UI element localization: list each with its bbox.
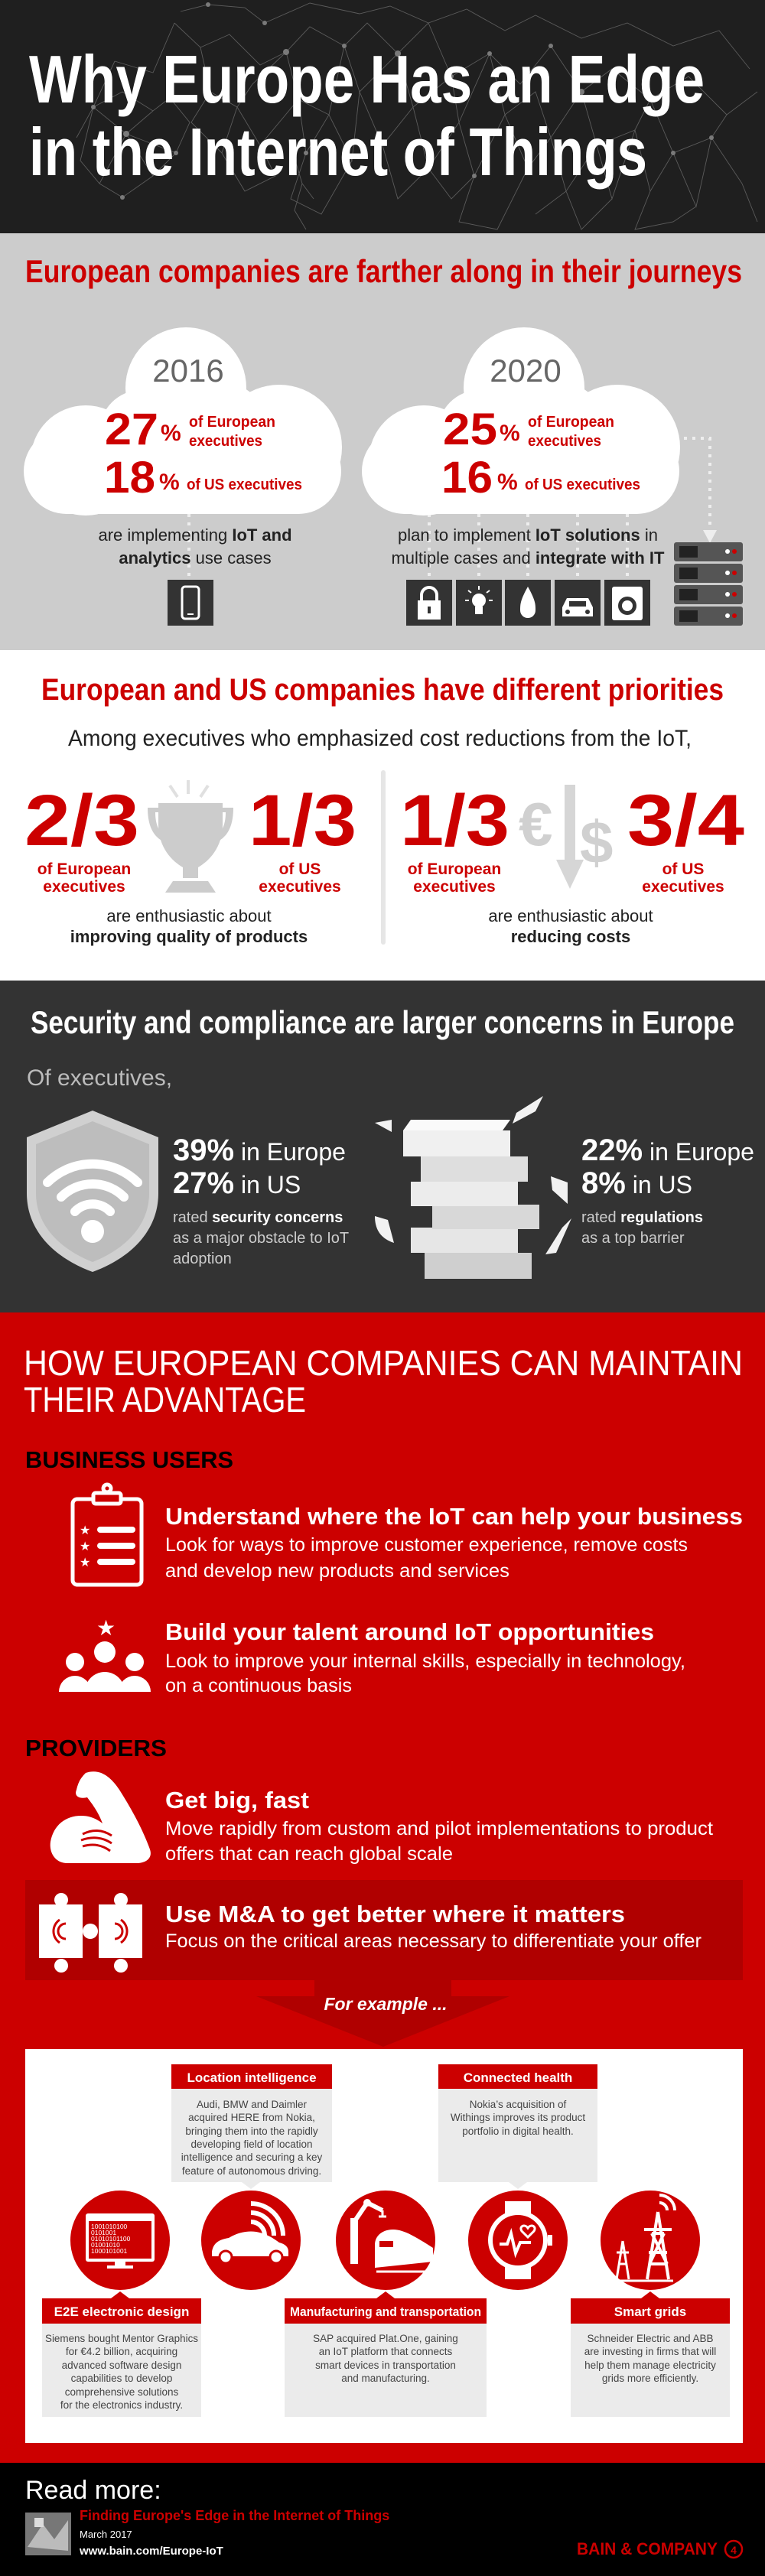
icon: paper stack bbox=[375, 1096, 571, 1279]
stat: 2/3 European: of European bbox=[37, 860, 131, 878]
caption: costs bbox=[488, 906, 653, 946]
icon: people: ★ bbox=[96, 1616, 116, 1640]
box: M&A bbox=[25, 1880, 743, 1980]
panel: examples bbox=[25, 2049, 743, 2443]
icon: currency arrow: € bbox=[519, 790, 552, 858]
icon: shield wifi bbox=[27, 1111, 158, 1272]
report info bbox=[79, 2508, 389, 2558]
read more heading: Read more: bbox=[25, 2476, 161, 2505]
cloud: 2016: 27 bbox=[105, 405, 158, 454]
stat: 1/3 European: of European bbox=[408, 860, 501, 878]
item: M&A bbox=[165, 1901, 702, 1952]
arrow: for example bbox=[256, 1980, 509, 2047]
logo: Bain & Company: 4 bbox=[731, 2544, 737, 2556]
stats: regulations: as a top barrier bbox=[581, 1230, 685, 1247]
box: connected health bbox=[438, 2064, 597, 2189]
cloud: 2020: 25 bbox=[443, 405, 497, 454]
box: smart grids bbox=[571, 2291, 730, 2417]
box: manufacturing and transportation: SAP acquired Plat.One, gaining bbox=[313, 2333, 458, 2344]
stat: 2/3 European: 2/3 bbox=[24, 780, 139, 861]
item: M&A: Focus on the critical areas necessary to differentiate your offer bbox=[165, 1930, 702, 1952]
caption: 2016: analytics use cases bbox=[119, 548, 272, 568]
box: location intelligence: feature of autonomous driving. bbox=[182, 2165, 321, 2177]
box: E2E electronic design: capabilities to develop bbox=[71, 2373, 172, 2384]
box: smart grids: help them manage electricity bbox=[584, 2360, 716, 2371]
stat: 1/3 US: 1/3 bbox=[249, 780, 356, 861]
caption: quality: improving quality of products bbox=[70, 927, 308, 946]
box: E2E electronic design bbox=[42, 2291, 201, 2417]
box: E2E electronic design: for the electronics industry. bbox=[60, 2399, 183, 2411]
icon: muscle arm bbox=[50, 1771, 151, 1863]
heading: advantage bbox=[24, 1343, 743, 1420]
caption: costs: are enthusiastic about bbox=[488, 906, 653, 925]
stats: security concerns bbox=[173, 1134, 349, 1267]
icon: puzzle bbox=[39, 1893, 142, 1973]
cloud: 2016: 2016 bbox=[152, 353, 224, 389]
icon: monitor circle: 0101001 bbox=[91, 2229, 116, 2236]
stat: 3/4 US: of US bbox=[662, 860, 704, 878]
icon: monitor circle: 01001010 bbox=[91, 2241, 120, 2249]
icon: clipboard bbox=[73, 1485, 142, 1585]
box: E2E electronic design: comprehensive solutions bbox=[65, 2386, 179, 2398]
icon: monitor circle: 1000101001 bbox=[91, 2247, 128, 2255]
footer bbox=[0, 2463, 765, 2576]
icon: monitor circle: 1001010100 bbox=[91, 2223, 128, 2230]
report info: www.bain.com/Europe-IoT bbox=[79, 2545, 223, 2558]
icon: currency arrow: $ bbox=[580, 808, 613, 876]
icon: smartwatch circle bbox=[468, 2191, 568, 2290]
caption: 2020: plan to implement IoT solutions in bbox=[398, 525, 658, 545]
item: talent: Build your talent around IoT opportunities bbox=[165, 1618, 654, 1645]
stats: security concerns: rated security concerns bbox=[173, 1209, 343, 1226]
item: talent: Look to improve your internal skills, especially in technology, bbox=[165, 1651, 685, 1672]
stat: 3/4 US bbox=[627, 780, 744, 896]
box: E2E electronic design: for €4.2 billion, acquiring bbox=[66, 2346, 177, 2357]
icon: clipboard: ★ bbox=[80, 1524, 90, 1537]
caption: quality: are enthusiastic about bbox=[106, 906, 272, 925]
heading: advantage: THEIR ADVANTAGE bbox=[24, 1380, 306, 1420]
box: smart grids: Schneider Electric and ABB bbox=[587, 2333, 714, 2344]
cloud: 2016: 18 bbox=[104, 453, 155, 503]
item: understand: and develop new products and services bbox=[165, 1560, 509, 1582]
cloud: 2020: executives bbox=[528, 433, 601, 450]
icon: currency arrow bbox=[519, 785, 613, 889]
item: talent bbox=[165, 1618, 685, 1696]
stats: security concerns: 27% in US bbox=[173, 1166, 301, 1200]
stats: security concerns: adoption bbox=[173, 1251, 232, 1267]
cloud: 2020: of US executives bbox=[525, 476, 640, 493]
cloud: 2020: 16 bbox=[441, 453, 493, 503]
icon: phone bbox=[168, 580, 213, 626]
subheading: of executives: Of executives, bbox=[27, 1065, 172, 1091]
icon: people bbox=[59, 1616, 151, 1692]
stats: security concerns: 39% in Europe bbox=[173, 1134, 346, 1167]
item: M&A: Use M&A to get better where it matters bbox=[165, 1901, 625, 1927]
caption: 2016 bbox=[98, 525, 292, 568]
box: connected health: Connected health bbox=[464, 2070, 572, 2085]
item: understand bbox=[165, 1503, 743, 1582]
box: E2E electronic design: advanced software design bbox=[62, 2360, 181, 2371]
item: talent: on a continuous basis bbox=[165, 1675, 352, 1696]
cloud: 2016: of US executives bbox=[187, 476, 302, 493]
box: connected health: Withings improves its product bbox=[451, 2112, 585, 2123]
icon: monitor circle bbox=[70, 2191, 170, 2290]
stats: regulations bbox=[581, 1134, 754, 1247]
stats: security concerns: as a major obstacle to IoT bbox=[173, 1230, 349, 1247]
box: manufacturing and transportation: an IoT platform that connects bbox=[319, 2346, 453, 2357]
heading: providers: PROVIDERS bbox=[25, 1735, 167, 1761]
box: manufacturing and transportation: smart devices in transportation bbox=[315, 2360, 456, 2371]
stat: 1/3 US bbox=[249, 780, 356, 896]
item: get big: offers that can reach global scale bbox=[165, 1843, 453, 1865]
stat: 1/3 European: executives bbox=[413, 878, 496, 896]
box: connected health: Nokia’s acquisition of bbox=[470, 2099, 567, 2110]
stat: 1/3 European: 1/3 bbox=[400, 780, 509, 861]
icon: car circle bbox=[201, 2191, 301, 2290]
box: location intelligence bbox=[171, 2064, 332, 2189]
box: smart grids: are investing in firms that will bbox=[584, 2346, 716, 2357]
dotted connectors bbox=[189, 438, 710, 580]
stat: 1/3 US: of US bbox=[279, 860, 321, 878]
cloud: 2020: % bbox=[497, 470, 518, 495]
stat: 3/4 US: 3/4 bbox=[627, 780, 744, 861]
stat: 2/3 European bbox=[24, 780, 139, 896]
stats: regulations: 8% in US bbox=[581, 1166, 692, 1200]
box: manufacturing and transportation: and manufacturing. bbox=[341, 2373, 430, 2384]
stats: regulations: rated regulations bbox=[581, 1209, 703, 1226]
thumbnail bbox=[25, 2513, 71, 2555]
stat: 1/3 European bbox=[400, 780, 509, 896]
box: manufacturing and transportation bbox=[285, 2291, 487, 2417]
icon: power pylons circle bbox=[601, 2191, 700, 2290]
box: connected health: portfolio in digital health. bbox=[462, 2126, 574, 2137]
icon: server stack bbox=[674, 542, 743, 626]
cloud: 2020: % bbox=[500, 421, 520, 446]
box: E2E electronic design: E2E electronic design bbox=[54, 2304, 189, 2319]
panel: security bbox=[0, 981, 765, 1312]
box: smart grids: Smart grids bbox=[614, 2304, 686, 2319]
box: E2E electronic design: Siemens bought Mentor Graphics bbox=[45, 2333, 198, 2344]
cloud: 2020: 2020 bbox=[490, 353, 562, 389]
box: location intelligence: bringing them into the rapidly bbox=[185, 2126, 318, 2137]
stat: 3/4 US: executives bbox=[642, 878, 724, 896]
caption: costs: reducing costs bbox=[511, 927, 630, 946]
caption: 2020: multiple cases and integrate with IT bbox=[391, 548, 665, 568]
cloud: 2020: of European bbox=[528, 414, 614, 431]
box: smart grids: grids more efficiently. bbox=[602, 2373, 698, 2384]
box: location intelligence: Location intelligence bbox=[187, 2070, 317, 2085]
item: get big: Move rapidly from custom and pilot implementations to product bbox=[165, 1818, 713, 1839]
cloud: 2016 bbox=[24, 327, 342, 516]
stat: 2/3 European: executives bbox=[43, 878, 125, 896]
cloud: 2016: % bbox=[161, 421, 181, 446]
cloud: 2020 bbox=[362, 327, 680, 516]
title bbox=[29, 41, 705, 190]
box: location intelligence: intelligence and securing a key bbox=[181, 2152, 323, 2163]
logo: Bain & Company: BAIN & COMPANY bbox=[577, 2539, 718, 2558]
subheading: Among executives who emphasized cost reductions from the IoT, bbox=[68, 726, 692, 751]
cloud: 2016: executives bbox=[189, 433, 262, 450]
panel: journeys bbox=[0, 233, 765, 650]
box: location intelligence: acquired HERE from Nokia, bbox=[188, 2112, 315, 2123]
arrow: for example: For example ... bbox=[324, 1994, 448, 2014]
box: manufacturing and transportation: Manufacturing and transportation bbox=[290, 2304, 481, 2319]
icon: clipboard: ★ bbox=[80, 1540, 90, 1553]
stat: 1/3 US: executives bbox=[259, 878, 341, 896]
icon: trophy bbox=[148, 780, 233, 893]
icons: devices bbox=[406, 580, 650, 626]
box: location intelligence: Audi, BMW and Daimler bbox=[197, 2099, 308, 2110]
icon: robot and train circle bbox=[336, 2191, 435, 2290]
item: understand: Understand where the IoT can help your business bbox=[165, 1503, 743, 1530]
report info: Finding Europe's Edge in the Internet of Things bbox=[80, 2508, 389, 2523]
stats: regulations: 22% in Europe bbox=[581, 1134, 754, 1167]
cloud: 2016: of European bbox=[189, 414, 275, 431]
header background bbox=[0, 0, 765, 233]
item: understand: Look for ways to improve customer experience, remove costs bbox=[165, 1534, 688, 1556]
heading: business users: BUSINESS USERS bbox=[25, 1446, 233, 1473]
panel: priorities bbox=[0, 650, 765, 981]
icon: monitor circle: 01010101100 bbox=[91, 2235, 131, 2243]
caption: 2016: are implementing IoT and bbox=[98, 525, 292, 545]
caption: 2020 bbox=[391, 525, 665, 568]
box: location intelligence: developing field of location bbox=[190, 2139, 313, 2150]
item: get big bbox=[165, 1787, 713, 1865]
caption: quality bbox=[70, 906, 308, 946]
icon: clipboard: ★ bbox=[80, 1556, 90, 1569]
panel: advantage bbox=[0, 1312, 765, 2463]
item: get big: Get big, fast bbox=[165, 1787, 309, 1813]
cloud: 2016: % bbox=[159, 470, 180, 495]
report info: March 2017 bbox=[80, 2529, 132, 2540]
